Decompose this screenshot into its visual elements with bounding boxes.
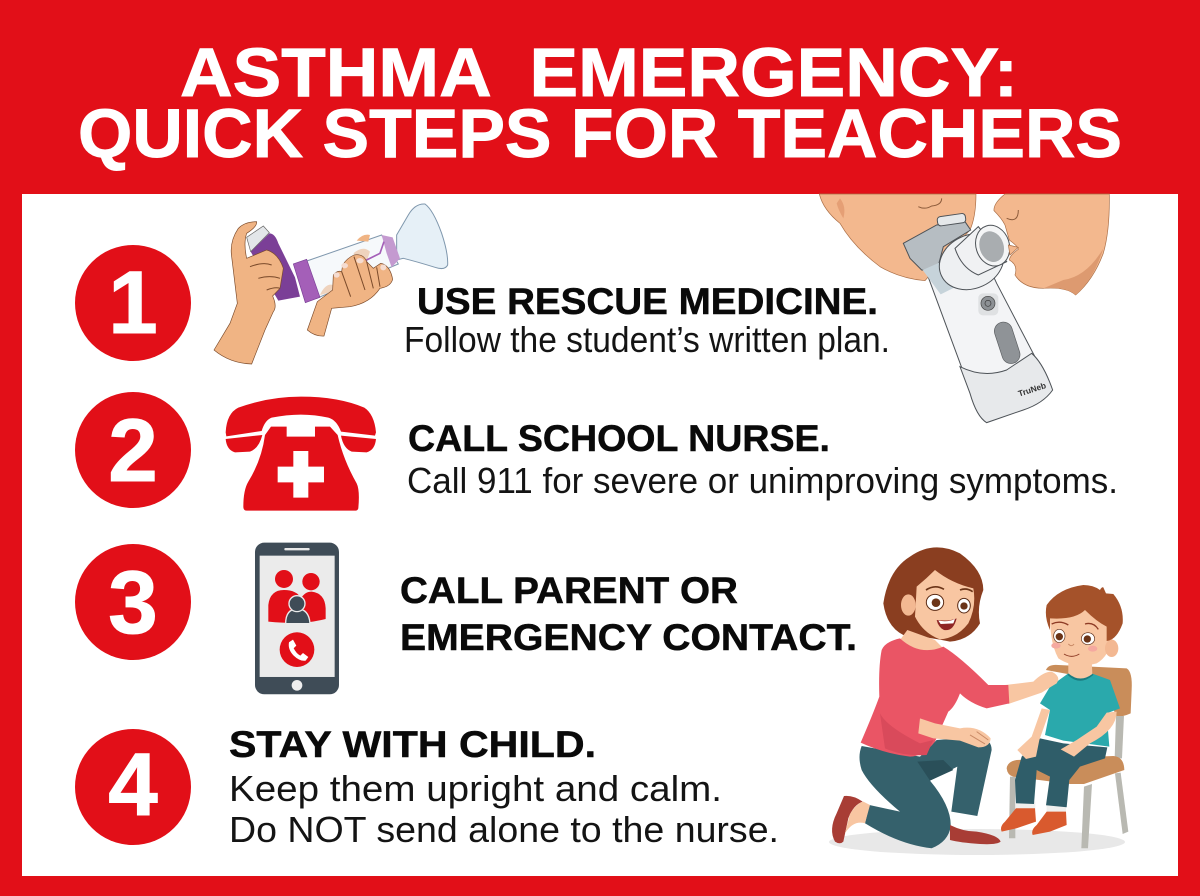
adult neck shading: [1043, 248, 1103, 295]
inhaler cap: [247, 226, 269, 252]
step 1 heading: USE RESCUE MEDICINE.: [417, 281, 878, 322]
phone body: [255, 543, 339, 694]
boy's eyes and mouth: [1051, 622, 1098, 656]
step 1 detail: Follow the student’s written plan.: [404, 319, 890, 360]
woman's forearm and hand: [918, 718, 991, 747]
woman's hair: [883, 547, 983, 642]
step 3 heading: EMERGENCY CONTACT.: [400, 617, 857, 658]
chamber reflections: [320, 249, 370, 295]
woman's trouser crease: [917, 760, 953, 781]
icon: red telephone with medical cross: [226, 397, 376, 511]
woman's top: [861, 638, 1009, 757]
boy's trousers: [1015, 738, 1107, 807]
child figure: [286, 596, 310, 624]
boy's neck: [1068, 658, 1092, 678]
woman's top shading: [880, 713, 933, 755]
mouthpiece tube: [955, 227, 1007, 275]
chair legs: [1009, 716, 1128, 848]
illustration: kneeling teacher: [832, 547, 1058, 848]
step 4 detail: Keep them upright and calm.: [229, 768, 722, 809]
illustration: faces with nebulizer: [819, 194, 1109, 423]
step 2 number badge: [75, 392, 191, 508]
purple collar: [293, 259, 320, 303]
adult nose line: [1007, 210, 1018, 220]
speaker slot: [284, 548, 310, 550]
purple valve: [382, 235, 400, 267]
boy's head: [1050, 607, 1115, 665]
adult face right: [994, 194, 1109, 295]
child face left: [819, 194, 976, 281]
boy's shirt collar: [1068, 674, 1093, 679]
boy's shirt: [1040, 673, 1120, 747]
woman's ear: [901, 594, 916, 616]
title: ASTHMA EMERGENCY:: [180, 34, 1018, 111]
chair back: [1046, 665, 1132, 717]
illustration: seated child on chair: [1001, 585, 1132, 848]
adult lips: [1008, 245, 1018, 255]
white content panel: [22, 194, 1178, 876]
white cross: [278, 451, 324, 498]
boy's hair: [1046, 585, 1123, 641]
spacer chamber: [305, 235, 398, 298]
title: [78, 34, 1122, 172]
step 3 heading: CALL PARENT OR: [400, 570, 738, 611]
step 3 number badge: [75, 544, 191, 660]
phone base: [243, 427, 359, 511]
nebulizer head and mouthpiece: [903, 213, 1018, 300]
step 4 number badge: 4: [108, 734, 158, 834]
right hand: [307, 255, 393, 336]
mask of spacer: [397, 204, 448, 269]
left hand finger lines: [250, 264, 280, 290]
step 4 detail: [229, 768, 779, 850]
woman's trousers: [859, 737, 992, 848]
step 2 detail: Call 911 for severe or unimproving symptoms.: [407, 460, 1118, 501]
step 3 heading: [400, 570, 857, 658]
right hand finger lines: [342, 257, 380, 297]
floor shadow: [829, 829, 1125, 855]
woman's face: [915, 570, 974, 639]
icon: hands using inhaler with spacer: [214, 204, 448, 364]
body band: [923, 262, 959, 294]
call symbol: [280, 632, 314, 667]
top cap: [903, 222, 971, 272]
top tab: [937, 213, 966, 226]
icon: smartphone with family and call symbol: [255, 543, 339, 694]
power button: [978, 293, 998, 315]
title: QUICK STEPS FOR TEACHERS: [78, 95, 1122, 172]
step 4 detail: Do NOT send alone to the nurse.: [229, 809, 779, 850]
child ear: [837, 198, 844, 218]
head disc: [930, 223, 1013, 300]
family red figures: [268, 570, 326, 623]
handset: [226, 397, 376, 452]
step 1 number badge: 1: [108, 252, 158, 352]
boy's shoes: [1001, 808, 1067, 835]
step 1 number badge: [75, 245, 191, 361]
woman's neck: [900, 630, 943, 656]
mouthpiece opening: [970, 221, 1015, 270]
left hand: [214, 222, 283, 364]
woman's knuckle lines: [970, 732, 988, 744]
step 2 heading: CALL SCHOOL NURSE.: [408, 418, 830, 459]
boy's socks: [1016, 802, 1066, 813]
chair seat: [1007, 756, 1124, 784]
woman's shoes: [832, 796, 1001, 844]
boy's arms: [1017, 708, 1117, 759]
step 3 number badge: 3: [108, 552, 158, 652]
woman's eyes and mouth: [926, 587, 973, 630]
step 2 number badge: 2: [108, 400, 158, 500]
dock brand: TruNeb: [1017, 380, 1047, 399]
home button: [292, 680, 302, 691]
nebulizer main body: [925, 240, 1037, 390]
step 4 number badge: [75, 729, 191, 845]
boy's ear: [1105, 640, 1118, 657]
phone screen: [260, 556, 335, 677]
child nose: [918, 198, 942, 208]
volume rocker: [992, 320, 1022, 366]
right hand fingernails: [334, 258, 386, 278]
woman's rear foot skin: [845, 802, 870, 833]
woman's extended arm skin: [1005, 672, 1058, 704]
right thumb: [357, 235, 370, 242]
nebulizer dock: [960, 353, 1053, 423]
inhaler body: [251, 233, 300, 301]
step 4 heading: STAY WITH CHILD.: [229, 724, 596, 765]
